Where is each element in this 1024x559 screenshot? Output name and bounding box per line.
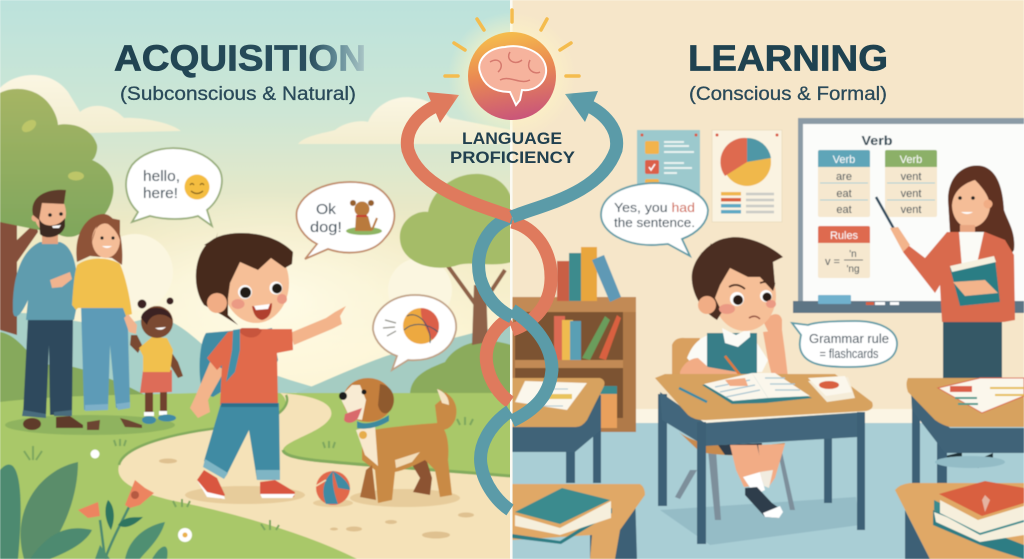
icon: basketball: [403, 308, 439, 344]
teal lower loop: [481, 411, 510, 510]
table: rules: 'ng: [846, 264, 860, 275]
table: right verb column: vent: [901, 188, 921, 200]
table: right verb column: Verb: [900, 154, 922, 166]
bushes: [0, 332, 145, 405]
small child: [130, 298, 183, 424]
title: acquisition: [114, 38, 366, 105]
shelf books: [554, 315, 621, 428]
arms: [190, 362, 225, 418]
table: left verb column: are: [836, 171, 852, 183]
table: left verb column: eat: [836, 188, 852, 200]
grass tufts: [24, 417, 473, 530]
head: [714, 261, 776, 331]
shoes: [197, 470, 225, 499]
table: rules: 'n: [849, 249, 857, 260]
desk: student: [655, 373, 873, 544]
speech bubble: ok dog: Ok: [316, 201, 337, 218]
top books: [557, 247, 621, 302]
title: learning: LEARNING: [688, 38, 888, 78]
teal arrow: [512, 91, 617, 421]
ball on ground: [316, 471, 350, 505]
open book: [702, 373, 812, 404]
poster: checklist: [637, 130, 700, 200]
torso: [687, 333, 768, 373]
table: right verb column: [885, 150, 937, 217]
speech bubble: ok dog: dog!: [310, 219, 342, 236]
desk: back right: [906, 378, 1024, 483]
flashcards: [808, 376, 855, 402]
boy pointing: [190, 232, 346, 499]
grass: [0, 393, 511, 559]
desk: front right with books: [895, 481, 1024, 559]
speech bubble: hello: here!: [143, 185, 178, 202]
bookshelf: [512, 247, 636, 432]
winding path: [118, 393, 511, 559]
desk: back left: [512, 378, 604, 483]
mother: [72, 214, 142, 430]
head: [223, 243, 289, 323]
speech bubble: hello: hello,: [143, 168, 180, 185]
icon: smiley: [184, 174, 210, 200]
foreground plants: [0, 450, 192, 559]
pen: [679, 388, 707, 402]
table: left verb column: eat: [836, 204, 852, 216]
teacher: [890, 166, 1015, 468]
student at desk: [672, 237, 795, 520]
legs and shoe: [730, 444, 785, 518]
hand: [725, 378, 748, 386]
speech bubble: yes you had: [601, 183, 708, 256]
whiteboard: Verb: [862, 133, 893, 148]
shirt: [207, 329, 293, 405]
speech bubble: grammar rule: [792, 321, 897, 367]
backpack: [200, 330, 240, 397]
dog: [339, 378, 456, 503]
poster: pie chart: [712, 130, 782, 222]
arms: [680, 358, 742, 380]
speech bubble: hello: [126, 148, 222, 226]
background tree right: [400, 174, 512, 345]
sun rays: [445, 10, 579, 76]
subtitle: subconscious and natural: (Subconscious & Natural): [120, 83, 356, 105]
table: rules: v =: [825, 256, 840, 268]
heading: language proficiency: LANGUAGE: [462, 129, 562, 148]
panel: learning classroom scene: [512, 0, 1024, 559]
tree left: [0, 89, 113, 335]
speech bubble: ok dog: [297, 182, 394, 259]
heading: language proficiency: PROFICIENCY: [450, 148, 576, 167]
teal middle left: [479, 217, 512, 317]
orange lower loop: [486, 318, 510, 402]
brain: [479, 46, 546, 105]
speech bubble: yes you had: Yes, you had: [614, 200, 695, 215]
icon: puppy: [346, 200, 382, 235]
icon: glowing brain: [445, 10, 579, 140]
speech bubble: grammar rule: Grammar rule: [809, 331, 889, 346]
speech bubble: yes you had: the sentence.: [614, 215, 695, 230]
face: [952, 180, 990, 228]
table: right verb column: vent: [901, 171, 921, 183]
table: left verb column: Verb: [833, 154, 855, 166]
hair: [948, 166, 1014, 262]
heading: language proficiency: [450, 129, 576, 167]
divider: [510, 0, 512, 559]
subtitle: conscious and formal: (Conscious & Formal): [689, 83, 887, 105]
desk: front left with book: [512, 484, 645, 559]
father: [13, 190, 83, 430]
arrows: intertwined paths to proficiency: [407, 91, 617, 510]
pointer: [876, 197, 903, 245]
table: left verb column: [818, 150, 870, 217]
table: right verb column: vent: [901, 204, 921, 216]
teacher shoe shadow: [935, 456, 1005, 468]
table: rules: [818, 226, 870, 278]
orange arrow: [407, 92, 551, 330]
title: acquisition: ACQUISITION: [114, 38, 366, 78]
speech bubble: ball: [373, 295, 456, 370]
jeans: [204, 403, 280, 480]
jacket: [903, 232, 1015, 322]
whiteboard: [793, 118, 1024, 313]
title: learning: [688, 38, 888, 105]
speech bubble: grammar rule: = flashcards: [820, 346, 879, 361]
clouds: [0, 75, 511, 144]
panel: acquisition park scene: [0, 0, 512, 559]
table: rules: Rules: [830, 230, 859, 242]
pencil: [725, 356, 747, 384]
distant hills: [0, 313, 330, 400]
